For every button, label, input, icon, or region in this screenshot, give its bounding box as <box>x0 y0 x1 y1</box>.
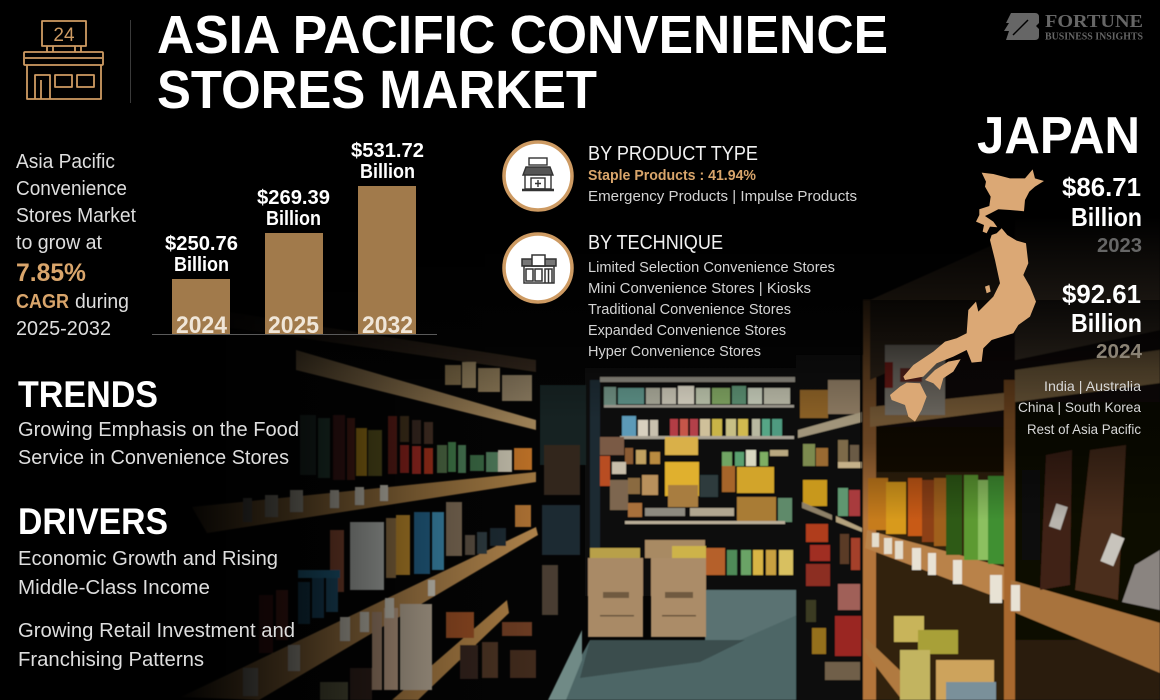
logo: Fortune Business Insights: FORTUNE <box>1045 11 1143 31</box>
price tags <box>243 498 252 522</box>
text block: by product type <box>588 143 857 205</box>
shelf products <box>445 365 461 385</box>
text block: drivers <box>18 501 295 671</box>
text block: trends: Growing Emphasis on the Food <box>18 419 299 441</box>
text block: Japan market values: 2024 <box>1096 341 1143 363</box>
text block: by technique: Expanded Convenience Stores <box>588 322 786 339</box>
text block: by technique: Hyper Convenience Stores <box>588 343 761 360</box>
text block: Japan market values: $92.61 <box>1062 279 1141 309</box>
text block: by technique: Limited Selection Convenience Stores <box>588 259 835 276</box>
text block: CAGR summary: Asia Pacific <box>16 151 115 173</box>
bar 2025 <box>257 187 330 339</box>
icon: 24-hour convenience store <box>24 21 103 99</box>
text block: CAGR summary: Convenience <box>16 178 127 200</box>
logo: Fortune Business Insights <box>1004 11 1143 42</box>
text block: by technique: BY TECHNIQUE <box>588 232 723 254</box>
center back wall <box>585 368 800 596</box>
icon: 24-hour convenience store: 24 <box>53 25 75 46</box>
text block: Japan market values: $86.71 <box>1062 172 1141 202</box>
text block: drivers: Economic Growth and Rising <box>18 548 278 570</box>
text block: by technique: Traditional Convenience Stores <box>588 301 791 318</box>
text block: by product type: Emergency Products | Impulse Products <box>588 188 857 205</box>
bar 2025: 2025 <box>268 312 319 339</box>
text block: other countries: India | Australia <box>1044 378 1141 394</box>
right wooden shelves <box>863 180 1160 700</box>
text block: drivers: DRIVERS <box>18 501 168 542</box>
text block: trends: Service in Convenience Stores <box>18 447 289 469</box>
bar 2032: $531.72 <box>351 140 424 162</box>
text block: CAGR summary: during <box>75 291 129 313</box>
text block: Japan market values: JAPAN <box>977 107 1140 165</box>
text block: drivers: Middle-Class Income <box>18 577 210 599</box>
icon: storefront in circle <box>504 234 572 302</box>
text block: other countries: China | South Korea <box>1018 399 1141 415</box>
text block: trends <box>18 374 299 469</box>
text block: CAGR summary: 7.85% <box>16 259 86 287</box>
text block: Japan market values: Billion <box>1071 308 1142 338</box>
cardboard boxes <box>588 540 706 637</box>
text block: other countries <box>1018 378 1141 437</box>
text block: CAGR summary: CAGR <box>16 291 69 313</box>
title <box>157 5 888 120</box>
text block: CAGR summary: Stores Market <box>16 205 136 227</box>
floor <box>557 590 806 700</box>
icon: shop in circle <box>504 142 572 210</box>
text block: CAGR summary <box>16 151 136 340</box>
bar 2024: Billion <box>174 254 229 276</box>
bar 2032: Billion <box>360 161 415 183</box>
text block: trends: TRENDS <box>18 374 158 415</box>
text block: by technique: Mini Convenience Stores | Kiosks <box>588 280 811 297</box>
text block: drivers: Franchising Patterns <box>18 649 204 671</box>
text block: Japan market values: 2023 <box>1097 235 1142 257</box>
title: STORES MARKET <box>157 60 597 120</box>
bar 2024 <box>165 233 238 339</box>
text block: other countries: Rest of Asia Pacific <box>1027 421 1141 437</box>
title: ASIA PACIFIC CONVENIENCE <box>157 5 888 65</box>
text block: by product type: Staple Products : 41.94% <box>588 168 756 184</box>
bar 2032 <box>351 140 424 339</box>
text block: drivers: Growing Retail Investment and <box>18 620 295 642</box>
text block: CAGR summary: 2025-2032 <box>16 318 111 340</box>
text block: by product type: BY PRODUCT TYPE <box>588 143 758 165</box>
text block: Japan market values: Billion <box>1071 202 1142 232</box>
text block: by technique <box>588 232 835 360</box>
logo: Fortune Business Insights: BUSINESS INSIGHTS <box>1045 32 1143 42</box>
bar 2025: Billion <box>266 208 321 230</box>
text block: CAGR summary: to grow at <box>16 232 102 254</box>
map: Japan <box>890 169 1044 422</box>
bar 2025: $269.39 <box>257 187 330 209</box>
bar 2024: 2024 <box>176 312 228 339</box>
middle rack <box>796 355 864 700</box>
bar 2032: 2032 <box>362 312 413 339</box>
bar chart: market size <box>152 140 437 339</box>
bar 2024: $250.76 <box>165 233 238 255</box>
left shelves <box>150 300 586 700</box>
text block: Japan market values <box>977 107 1143 363</box>
